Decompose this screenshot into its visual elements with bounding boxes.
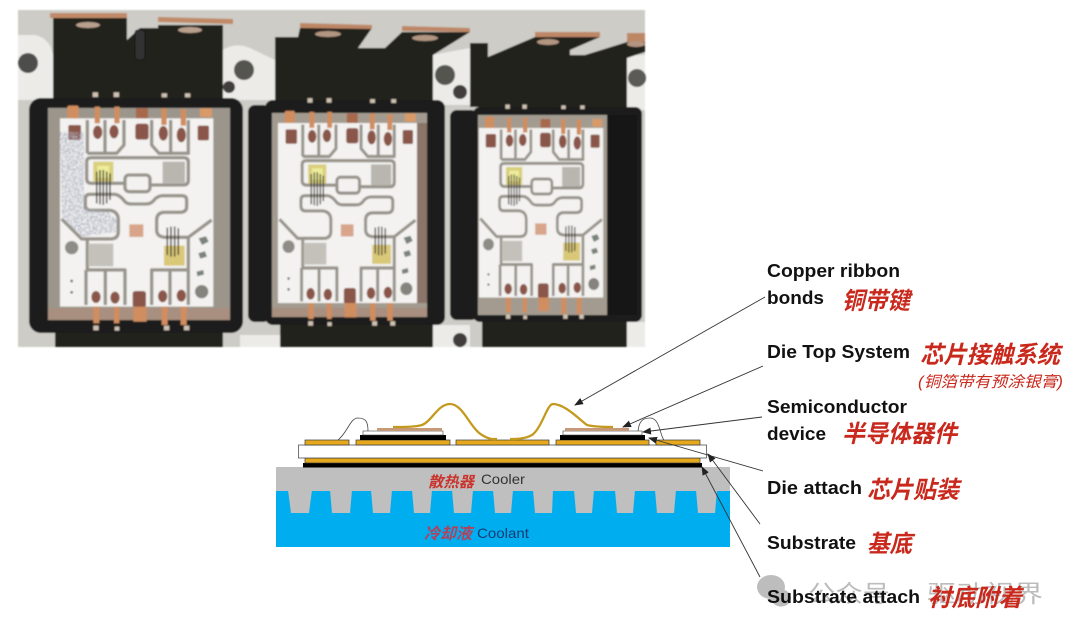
label: die attach: 芯片贴装 — [867, 477, 963, 504]
label: die attach — [767, 477, 963, 504]
label: substrate attach: 衬底附着 — [928, 585, 1025, 612]
die stack left — [360, 428, 446, 440]
substrate with copper — [298, 440, 706, 463]
cooler label — [428, 471, 525, 491]
watermark: 公众号 — [808, 581, 890, 608]
module 2 — [248, 23, 470, 347]
photo: three power modules — [18, 10, 646, 347]
label: substrate attach: Substrate attach — [767, 587, 920, 607]
label: die top system — [767, 342, 1064, 391]
watermark: 驱动视界 — [927, 581, 1043, 608]
copper ribbons — [393, 404, 613, 439]
watermark — [757, 575, 1043, 608]
label: semiconductor device: 半导体器件 — [842, 421, 959, 448]
label: substrate: 基底 — [867, 531, 916, 558]
label: copper ribbon bonds: 铜带键 — [842, 288, 914, 315]
cross-section diagram — [276, 404, 730, 547]
substrate attach layer — [303, 463, 702, 468]
die stack right — [560, 428, 645, 440]
module 3 — [450, 32, 645, 347]
label: substrate: Substrate — [767, 533, 856, 553]
bond wires — [338, 418, 664, 440]
label: copper ribbon bonds: bonds — [767, 288, 824, 308]
coolant — [276, 490, 730, 547]
coolant label: 冷却液 — [424, 525, 475, 543]
label: die top system: 芯片接触系统 — [920, 342, 1064, 369]
cooler — [276, 467, 730, 513]
label: die top system: Die Top System — [767, 342, 910, 362]
label: copper ribbon bonds — [767, 261, 914, 315]
label: copper ribbon bonds: Copper ribbon — [767, 261, 900, 281]
coolant label: Coolant — [477, 525, 529, 541]
cooler label: 散热器 — [428, 474, 476, 491]
label: substrate — [767, 531, 916, 558]
leader arrows — [575, 297, 765, 577]
label: die attach: Die attach — [767, 478, 862, 498]
cooler label: Cooler — [481, 471, 525, 487]
label: semiconductor device: device — [767, 424, 826, 444]
coolant label — [424, 525, 529, 543]
label: substrate attach — [767, 585, 1025, 612]
label: die top system: (铜箔带有预涂银膏) — [918, 373, 1063, 391]
label: semiconductor device: Semiconductor — [767, 397, 907, 417]
module 1 — [29, 13, 243, 347]
label: semiconductor device — [767, 397, 959, 448]
